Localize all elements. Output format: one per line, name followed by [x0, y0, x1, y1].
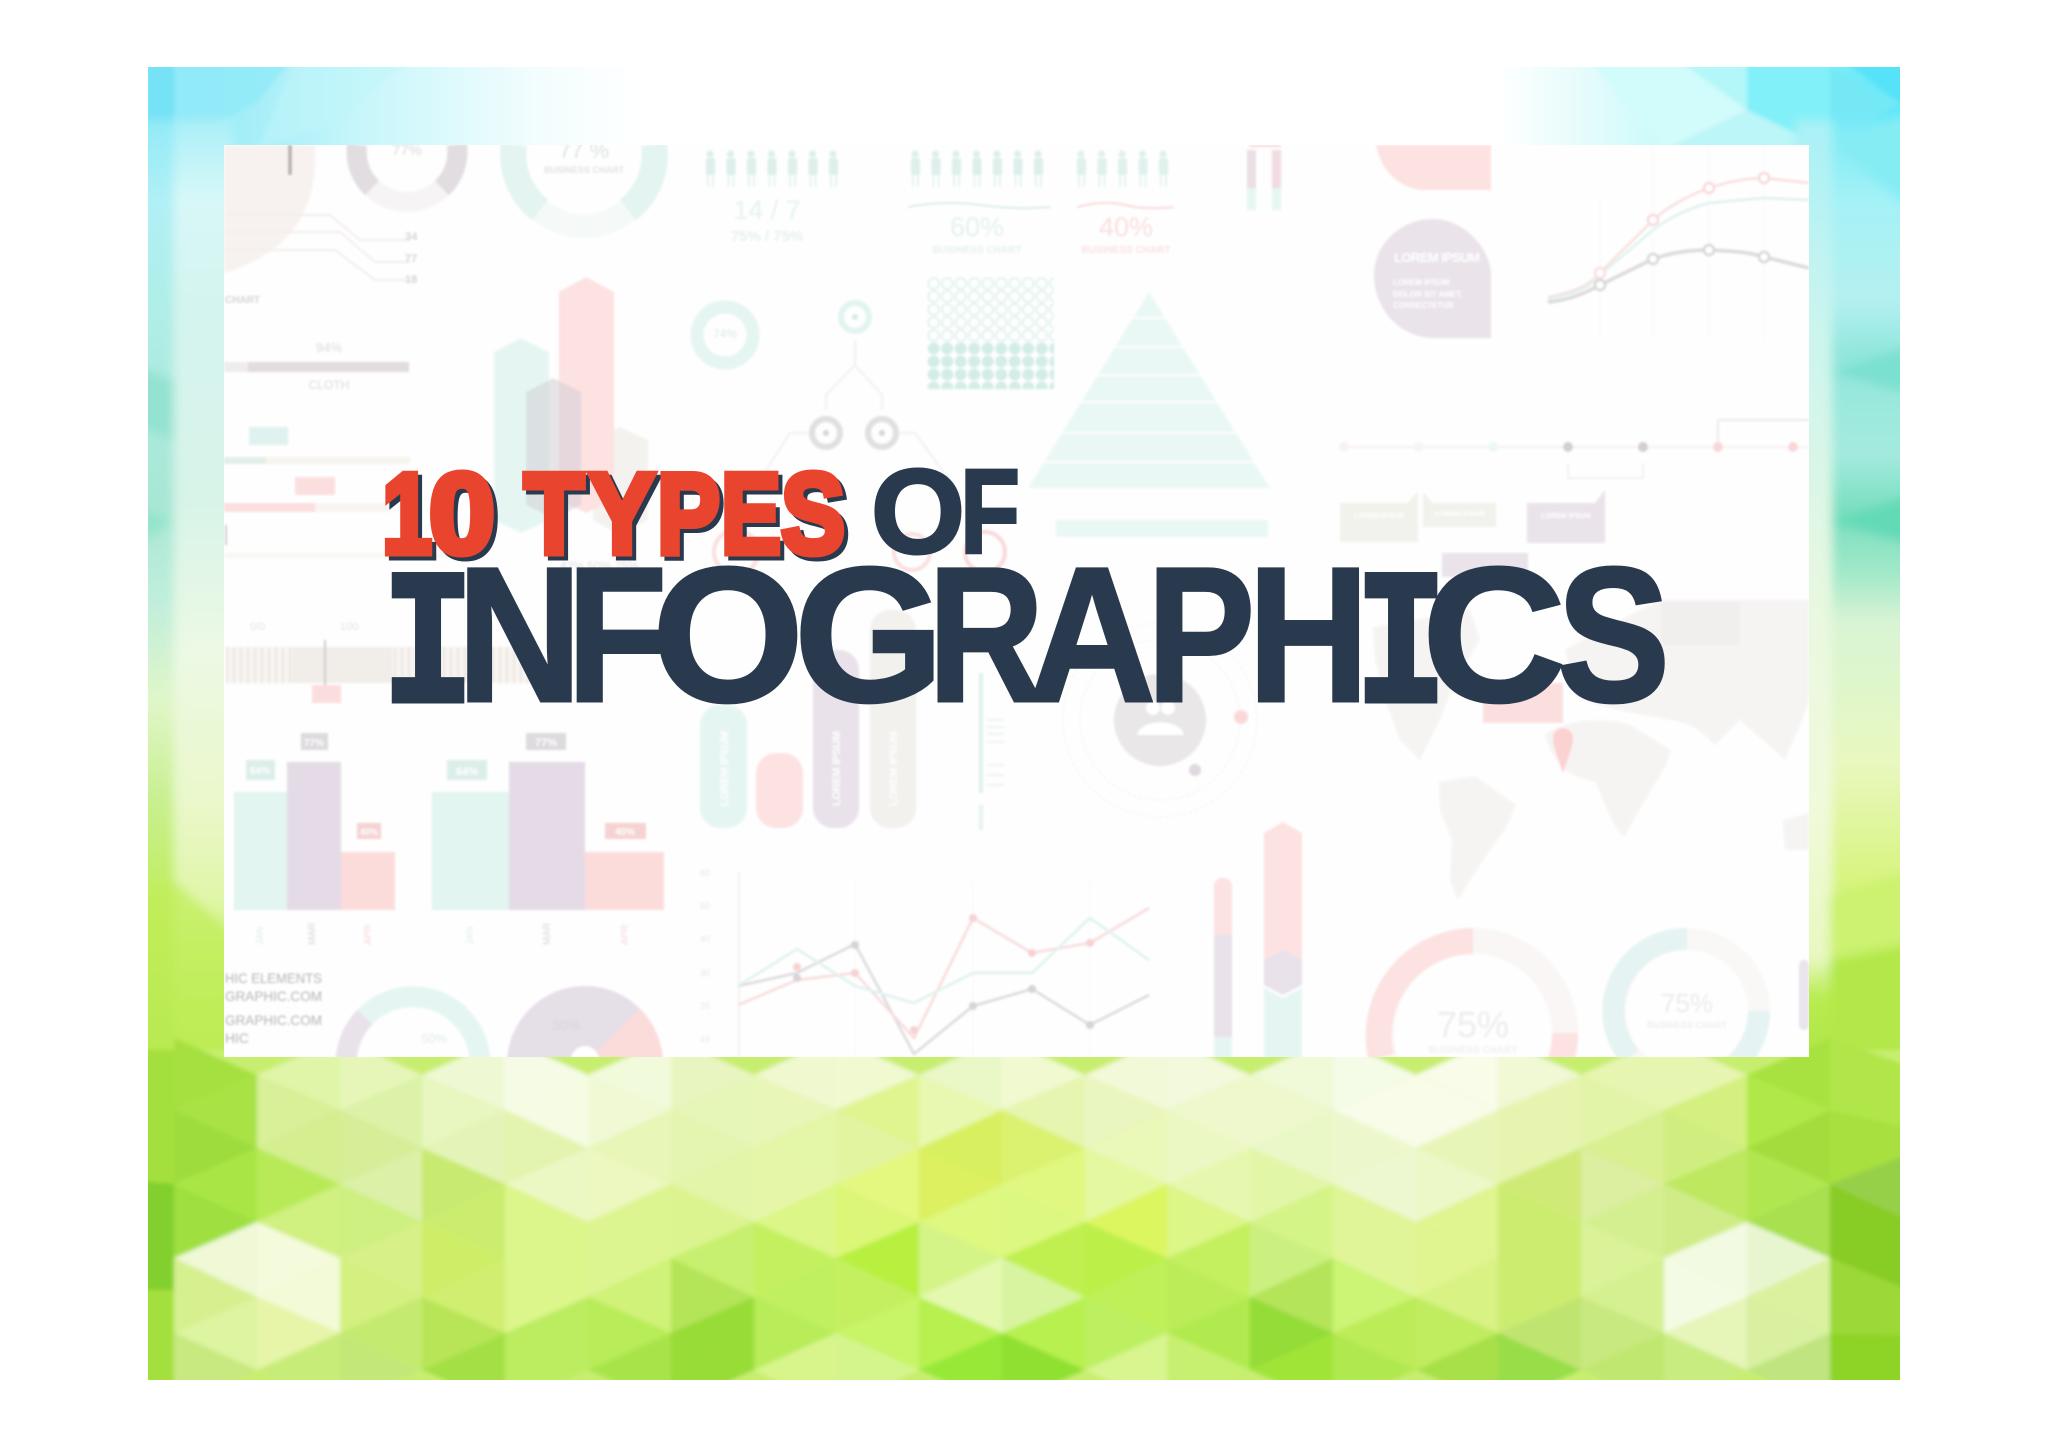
title word: INFOGRAPHICS: N [457, 527, 582, 742]
clipped credit text: HIC ELEMENTS [225, 970, 322, 986]
bar chart two: 40% [615, 827, 635, 838]
callout boxes: LOREM IPSUM [1435, 511, 1485, 518]
people icons: 40 percent [1071, 150, 1175, 256]
people icons: 60 percent: BUSINESS CHART [933, 245, 1021, 256]
bottom pie chart: 50% [552, 1017, 580, 1033]
small donut 74 percent: 74% [713, 327, 737, 341]
title word: INFOGRAPHICS: I [382, 541, 474, 759]
title word: OF [871, 445, 1020, 579]
purple lorem ipsum bubble: LOREM IPSUM [1393, 278, 1450, 287]
title word: OF: O [871, 445, 965, 579]
title line: 10 TYPES: T [524, 451, 584, 578]
bar chart one: 40% [360, 827, 378, 837]
line chart top right [1547, 170, 1809, 304]
thermometer bars [1247, 145, 1281, 210]
donut teal 75 percent: BUSINESS CHART [1647, 1020, 1728, 1030]
title word: INFOGRAPHICS: P [1147, 527, 1255, 742]
title line: 10 TYPES: P [657, 451, 720, 578]
progress bars left: 94% [316, 340, 342, 355]
progress bars left [224, 340, 464, 558]
bottom pie chart [506, 985, 664, 1057]
purple lorem ipsum bubble [1374, 219, 1491, 338]
bar chart two: JAN [465, 926, 476, 945]
title word: OF: F [960, 445, 1020, 579]
title line: 10 TYPES: Y [589, 451, 655, 578]
pill bars: LOREM IPSUM [831, 731, 843, 806]
top cyan band [148, 67, 1900, 145]
bar chart one [234, 733, 395, 945]
multi-line chart bottom: 30 [700, 968, 710, 978]
progress bars left: CLOTH [309, 378, 349, 392]
bar chart two: 77% [535, 737, 557, 749]
small donut 74 percent [697, 307, 753, 363]
pie fragment top left: 77 [405, 253, 417, 265]
title word: INFOGRAPHICS: G [794, 527, 944, 742]
multi-line chart bottom: 60 [700, 868, 710, 878]
people icons: 60 percent [901, 150, 1051, 256]
purple donut fragment [1799, 960, 1809, 1030]
clipped credit text: GRAPHIC.COM [225, 988, 322, 1004]
clipped credit text [225, 970, 322, 1046]
percentage labels and target circles behind title: 42% 50% 75% [560, 559, 639, 573]
people icons: 40 percent: 40% [1099, 212, 1153, 242]
donut pink 75 percent: 75% [1437, 1004, 1509, 1045]
clipped credit text: HIC [225, 1030, 249, 1046]
map callouts and pin [1482, 682, 1574, 772]
donut teal 75 percent: 75% [1661, 988, 1713, 1018]
percentage labels and target circles behind title [560, 530, 1005, 574]
pill bars: LOREM IPSUM [719, 731, 731, 806]
faded chart elements [224, 145, 1809, 1057]
world map [1373, 600, 1809, 900]
pie fragment top left [224, 145, 418, 306]
slide canvas [148, 67, 1900, 1380]
left side strip [148, 116, 236, 1054]
timeline with dots [1339, 420, 1809, 478]
bar chart two: MAR [542, 923, 553, 945]
people icons: 14 of 7 [706, 150, 838, 241]
pyramid chart [1020, 292, 1280, 537]
title word: INFOGRAPHICS: C [1422, 527, 1566, 742]
donut pink 75 percent: BUSINESS CHART [1429, 1045, 1517, 1056]
people icons: 14 of 7: 14 / 7 [733, 195, 801, 225]
title word: INFOGRAPHICS: O [652, 527, 804, 742]
multi-line chart bottom: 40 [700, 934, 710, 944]
pie fragment top left: 34 [405, 231, 418, 243]
bar chart two: 64% [456, 766, 478, 778]
bar chart one: 64% [250, 766, 270, 777]
people icons: 40 percent: BUSINESS CHART [1082, 245, 1170, 256]
title word: INFOGRAPHICS: R [928, 527, 1044, 742]
purple lorem ipsum bubble: LOREM IPSUM [1394, 250, 1480, 265]
donut: 77 percent [346, 145, 468, 211]
barcode timeline bar [226, 621, 540, 703]
multi-line chart bottom: 50 [700, 901, 710, 911]
clipped credit text: GRAPHIC.COM [225, 1012, 322, 1028]
people icons: 14 of 7: 75% / 75% [731, 228, 803, 245]
title word: INFOGRAPHICS: F [567, 527, 667, 742]
network tree diagram [760, 303, 960, 495]
bar chart one: JAN [255, 926, 266, 945]
bottom donut 50 percent [346, 997, 480, 1064]
bar chart one: APR [363, 924, 374, 945]
title line: 10 TYPES: 1 [382, 451, 432, 578]
multi-line chart bottom: 20 [700, 1001, 710, 1011]
multi-line chart bottom [700, 868, 1149, 1057]
pill bars: LOREM IPSUM [888, 731, 900, 806]
title word: INFOGRAPHICS: S [1557, 527, 1670, 742]
pie fragment top left: CHART [225, 295, 260, 306]
title line: 10 TYPES: S [781, 451, 845, 578]
purple lorem ipsum bubble: CONSECTETUR [1393, 301, 1454, 310]
title word: INFOGRAPHICS: H [1248, 527, 1369, 742]
3D hexagon column bars [494, 277, 648, 535]
title block [382, 445, 1670, 759]
barcode timeline bar: 100 [340, 621, 358, 633]
donut: 77 percent: 77% [392, 142, 422, 159]
bar chart one: MAR [307, 923, 318, 945]
bar chart one: 77% [304, 738, 324, 749]
donut teal 75 percent [1613, 939, 1759, 1083]
pie fragment top left: 18 [405, 274, 417, 286]
callout boxes: LOREM IPSUM [1354, 513, 1404, 520]
thin vertical scale [979, 673, 1004, 830]
purple lorem ipsum bubble: DOLOR SIT AMET, [1393, 290, 1462, 299]
title line: 10 TYPES: E [721, 451, 781, 578]
donut: 77 percent business chart: 77 % [559, 138, 609, 163]
title line: 10 TYPES: 0 [429, 451, 495, 578]
pink speech shape [1376, 145, 1491, 190]
hexagon dot grid [927, 277, 1054, 389]
callout boxes: LOREM IPSUM [1541, 513, 1591, 520]
donut pink 75 percent [1365, 928, 1578, 1057]
bottom green triangle mosaic [130, 1038, 1920, 1407]
people icons: 60 percent: 60% [950, 212, 1004, 242]
segmented vertical bars [1214, 822, 1302, 1062]
donut: 77 percent business chart: BUSINESS CHART [544, 165, 625, 175]
title line: 10 TYPES [382, 451, 845, 578]
title word: INFOGRAPHICS [382, 527, 1670, 759]
multi-line chart bottom: 10 [700, 1034, 710, 1044]
title word: INFOGRAPHICS: I [1355, 541, 1447, 759]
pill bars [700, 610, 916, 828]
bar chart two: APR [620, 924, 631, 945]
callout boxes [1340, 490, 1605, 577]
panel: white chart collage [224, 145, 1809, 1057]
barcode timeline bar: 0/0 [250, 621, 265, 633]
donut: 77 percent business chart [500, 145, 668, 236]
bar chart two [432, 733, 664, 945]
bottom donut 50 percent: 50% [421, 1031, 447, 1046]
concentric circle with people icon [1114, 674, 1249, 776]
title word: INFOGRAPHICS: A [1028, 527, 1156, 742]
right side strip [1792, 112, 1900, 1054]
